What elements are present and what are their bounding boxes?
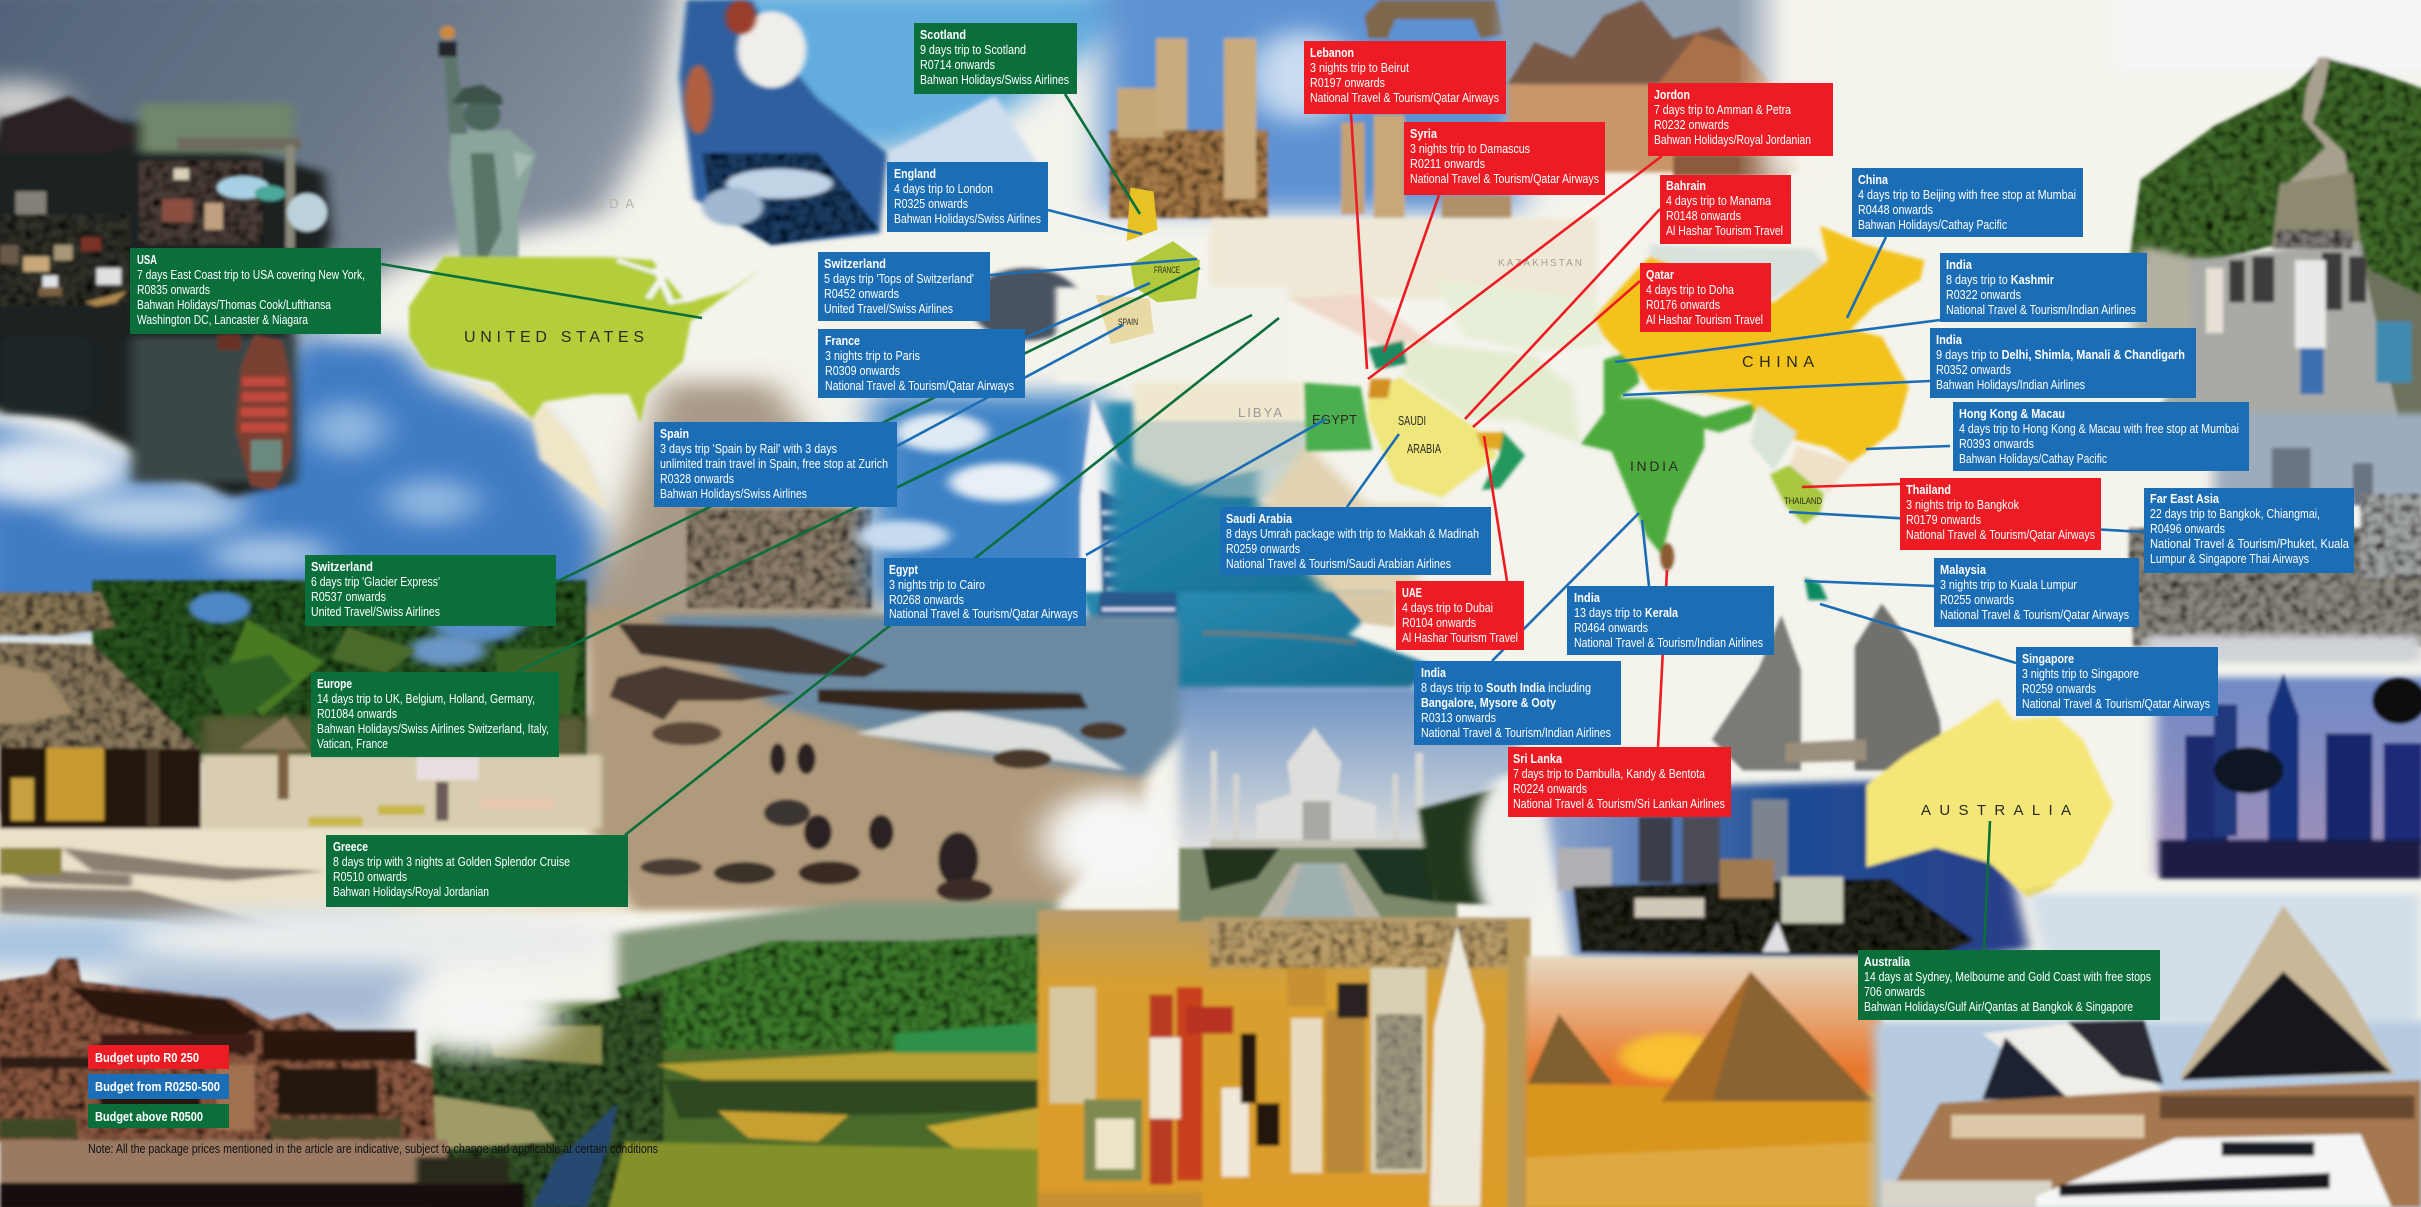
callout: Qatar: 4 days trip to Doha — [1646, 282, 1735, 297]
connector lines — [381, 94, 2144, 950]
callout: Qatar: Qatar — [1646, 267, 1674, 282]
blue sky and clouds — [0, 337, 617, 628]
callout: Spain: 3 days trip 'Spain by Rail' with 3 days — [660, 441, 837, 456]
callout: India Kerala: National Travel & Tourism/Indian Airlines — [1574, 635, 1763, 650]
callout: Australia: Bahwan Holidays/Gulf Air/Qantas at Bangkok & Singapore — [1864, 999, 2133, 1014]
callout: Greece: Bahwan Holidays/Royal Jordanian — [333, 884, 489, 899]
callout: Scotland: 9 days trip to Scotland — [920, 42, 1026, 57]
sea right — [1103, 402, 1258, 631]
sea and causeway — [1179, 592, 1434, 688]
pale blue sea — [2029, 894, 2421, 1026]
callout: Bahrain: 4 days trip to Manama — [1666, 193, 1772, 208]
callout: Greece: R0510 onwards — [333, 869, 407, 884]
floating market — [0, 80, 332, 498]
map: USA — [409, 256, 760, 513]
callout: India Kerala: R0464 onwards — [1574, 620, 1648, 635]
label: Spain: SPAIN — [1118, 317, 1138, 327]
legend: budget up to R0 250 — [88, 1045, 229, 1069]
ground — [0, 1140, 448, 1185]
callout: Singapore: National Travel & Tourism/Qatar Airways — [2022, 696, 2210, 711]
map: china — [1594, 226, 1924, 463]
callout: Thailand: 3 nights trip to Bangkok — [1906, 497, 2019, 512]
callout: Australia: 14 days at Sydney, Melbourne and Gold Coast with free stops — [1864, 969, 2151, 984]
callout: Malaysia — [1934, 558, 2139, 627]
label: Saudi: SAUDI — [1398, 413, 1426, 428]
sea and coast — [1110, 444, 1442, 628]
callout: Hong Kong and Macau: Hong Kong & Macau — [1959, 406, 2065, 421]
deck chair — [0, 848, 62, 875]
map: middle east — [1304, 341, 1525, 498]
callout: India Delhi — [1930, 328, 2196, 398]
callout: Saudi Arabia: 8 days Umrah package with trip to Makkah & Madinah — [1226, 526, 1479, 541]
callout: Greece: Greece — [333, 839, 368, 854]
callout: Thailand: National Travel & Tourism/Qatar Airways — [1906, 527, 2095, 542]
callout: India Delhi: R0352 onwards — [1936, 362, 2011, 377]
callout: China: 4 days trip to Beijing with free stop at Mumbai — [1858, 187, 2076, 202]
callout: Switzerland glacier: 6 days trip 'Glacier Express' — [311, 574, 440, 589]
callout: India South: National Travel & Tourism/Indian Airlines — [1421, 725, 1611, 740]
callout: France: France — [825, 333, 860, 348]
callout: Lebanon: 3 nights trip to Beirut — [1310, 60, 1409, 75]
burj al arab — [1080, 398, 1184, 628]
label: Australia: AUSTRALIA — [1921, 802, 2071, 819]
map labels — [464, 196, 2071, 819]
legend: budget above R0500 — [88, 1104, 229, 1128]
callout: UAE: 4 days trip to Dubai — [1402, 600, 1493, 615]
callout: Egypt: 3 nights trip to Cairo — [889, 577, 985, 592]
colombo — [1542, 778, 2029, 960]
callout: Lebanon — [1304, 41, 1506, 114]
label: United States: UNITED STATES — [464, 329, 644, 346]
legend: budget R0250-500 — [88, 1074, 229, 1099]
callout: India South: R0313 onwards — [1421, 710, 1496, 725]
papyrus left panel — [1038, 910, 1219, 1207]
callout: Syria: R0211 onwards — [1410, 156, 1485, 171]
kasbah — [0, 958, 436, 1142]
callout: Switzerland tops: Switzerland — [824, 256, 886, 271]
callout: Spain: unlimited train travel in Spain, free stop at Zurich — [660, 456, 888, 471]
callout: USA: R0835 onwards — [137, 282, 210, 297]
label: France: FRANCE — [1154, 265, 1180, 275]
connector: Kashmir — [1615, 320, 1940, 362]
callout: Jordan: Jordon — [1654, 87, 1690, 102]
callout: Spain: R0328 onwards — [660, 471, 734, 486]
chateau — [563, 383, 887, 635]
callout: Bahrain: Al Hashar Tourism Travel — [1666, 223, 1783, 238]
callout: India Delhi: India — [1936, 332, 1963, 347]
callout: India South: 8 days trip to South India including — [1421, 680, 1591, 695]
callout: Syria: 3 nights trip to Damascus — [1410, 141, 1530, 156]
callout: Spain: Bahwan Holidays/Swiss Airlines — [660, 486, 807, 501]
callout: Europe: R01084 onwards — [317, 706, 397, 721]
connector: USA — [381, 264, 702, 318]
callout: Far East Asia — [2144, 488, 2354, 573]
callout: Malaysia: Malaysia — [1940, 562, 1987, 577]
callout: Far East Asia: Far East Asia — [2150, 491, 2220, 506]
white glow beside taj — [1042, 790, 1181, 890]
callout: Lebanon: R0197 onwards — [1310, 75, 1385, 90]
callout: Egypt — [884, 558, 1086, 626]
pale map lands — [1056, 218, 1828, 498]
legend: budget above R0500: Budget above R0500 — [95, 1109, 203, 1124]
callout: Saudi Arabia: National Travel & Tourism/Saudi Arabian Airlines — [1226, 556, 1451, 571]
callout: India Kashmir: National Travel & Tourism/Indian Airlines — [1946, 302, 2136, 317]
callout: Spain: Spain — [660, 426, 689, 441]
callout: India Delhi: 9 days trip to Delhi, Shimla, Manali & Chandigarh — [1936, 347, 2185, 362]
legend: budget up to R0 250: Budget upto R0 250 — [95, 1050, 199, 1065]
connector: Bahrain — [1465, 209, 1660, 419]
legend: budget bands — [88, 1045, 229, 1128]
hong kong skyline — [2129, 413, 2421, 605]
connector: Saudi Arabia — [1347, 434, 1399, 507]
callout: England: England — [894, 166, 936, 181]
papyrus — [1187, 917, 1530, 1207]
callout: Greece — [326, 835, 628, 907]
callout: Sri Lanka: R0224 onwards — [1513, 781, 1587, 796]
callout: Egypt: Egypt — [889, 562, 919, 577]
callout: Thailand: Thailand — [1906, 482, 1951, 497]
callout: Australia: Australia — [1864, 954, 1911, 969]
callout: Lebanon: Lebanon — [1310, 45, 1354, 60]
label: Canada: ADA — [594, 196, 634, 211]
white haze — [394, 972, 563, 1057]
twin towers — [1712, 604, 1944, 770]
blue sky ruins — [1102, 0, 1519, 210]
callout: Sri Lanka: 7 days trip to Dambulla, Kandy & Bentota — [1513, 766, 1706, 781]
callout: Far East Asia: National Travel & Tourism/Phuket, Kuala — [2150, 536, 2350, 551]
callout: Singapore — [2016, 647, 2218, 716]
callout: UAE: UAE — [1402, 585, 1422, 600]
connector: Syria — [1384, 195, 1439, 352]
callout: Europe: 14 days trip to UK, Belgium, Holland, Germany, — [317, 691, 535, 706]
callout: France: R0309 onwards — [825, 363, 900, 378]
callout: USA — [130, 248, 381, 334]
callout: Saudi Arabia: Saudi Arabia — [1226, 511, 1293, 526]
great wall — [2113, 0, 2421, 459]
callout: India South — [1414, 661, 1621, 745]
map: south east asia — [1660, 406, 1851, 600]
callout: Europe: Europe — [317, 676, 352, 691]
connector: Greece — [625, 318, 1279, 835]
callout: Saudi Arabia — [1220, 507, 1491, 575]
taj mahal — [1179, 687, 1550, 929]
connector: UAE — [1484, 436, 1507, 581]
opera house — [1874, 906, 2421, 1207]
palm shadows — [0, 848, 324, 948]
callout: Greece: 8 days trip with 3 nights at Golden Splendor Cruise — [333, 854, 570, 869]
sea behind burj — [1080, 592, 1235, 681]
connector: Delhi — [1623, 381, 1930, 395]
connector: Egypt — [1086, 419, 1326, 555]
legend: budget R0250-500: Budget from R0250-500 — [95, 1079, 220, 1094]
photo collage: top left quadrant — [0, 0, 1258, 635]
clouds near Burj — [856, 394, 1103, 601]
callout: Scotland: Scotland — [920, 27, 966, 42]
callout: UAE — [1396, 581, 1524, 650]
palms — [93, 581, 586, 763]
callout: Switzerland tops: United Travel/Swiss Airlines — [824, 301, 953, 316]
callout: India Delhi: Bahwan Holidays/Indian Airlines — [1936, 377, 2085, 392]
label: Libya: LIBYA — [1238, 405, 1282, 420]
callout: Far East Asia: 22 days trip to Bangkok, Chiangmai, — [2150, 506, 2320, 521]
connector: Europe — [517, 315, 1252, 672]
beach sand — [0, 786, 741, 925]
callout: Europe: Bahwan Holidays/Swiss Airlines Switzerland, Italy, — [317, 721, 549, 736]
callout: Egypt: R0268 onwards — [889, 592, 964, 607]
label: Kazakhstan: KAZAKHSTAN — [1498, 258, 1582, 269]
callout: Hong Kong and Macau: R0393 onwards — [1959, 436, 2034, 451]
label: Thailand: THAILAND — [1784, 496, 1822, 506]
callout: India Kashmir: 8 days trip to Kashmir — [1946, 272, 2054, 287]
valley — [432, 902, 1065, 1207]
callout: Scotland: R0714 onwards — [920, 57, 995, 72]
callout: India Kashmir — [1940, 253, 2147, 322]
connector: China — [1847, 237, 1886, 318]
callout: Switzerland glacier: United Travel/Swiss Airlines — [311, 604, 440, 619]
callout: Lebanon: National Travel & Tourism/Qatar Airways — [1310, 90, 1499, 105]
callout: Singapore: 3 nights trip to Singapore — [2022, 666, 2139, 681]
callout: Scotland — [914, 23, 1077, 94]
callout: Malaysia: R0255 onwards — [1940, 592, 2014, 607]
connector: Thailand — [1802, 484, 1900, 487]
callout: Bahrain: R0148 onwards — [1666, 208, 1741, 223]
callout: England: R0325 onwards — [894, 196, 968, 211]
photo collage: bottom right quadrant — [1179, 592, 2421, 1207]
singapore skyline — [2156, 674, 2421, 879]
ruins right — [1341, 0, 1511, 218]
footnote: Note: All the package prices mentioned in the article are indicative, subject to change and applicable at certain conditions — [88, 1141, 658, 1156]
penguin beach — [586, 608, 1235, 910]
callout: England: Bahwan Holidays/Swiss Airlines — [894, 211, 1041, 226]
connector: Australia — [1984, 821, 1990, 950]
connector: Kerala — [1642, 520, 1649, 586]
label: Arabia: ARABIA — [1407, 441, 1441, 456]
ruins left — [1110, 38, 1268, 218]
callout: Sri Lanka: National Travel & Tourism/Sri Lankan Airlines — [1513, 796, 1725, 811]
connector: Lebanon — [1351, 114, 1367, 369]
callout: Switzerland tops: 5 days trip 'Tops of Switzerland' — [824, 271, 974, 286]
connector: Switzerland glacier — [556, 268, 1200, 582]
callout: USA: Bahwan Holidays/Thomas Cook/Lufthansa — [137, 297, 332, 312]
callout: Qatar — [1640, 263, 1771, 332]
callout: Spain — [654, 422, 897, 507]
soft clouds — [0, 910, 617, 1030]
connector: England — [1048, 210, 1142, 234]
map: western Europe — [1096, 188, 1200, 344]
dome — [971, 268, 1082, 341]
connector: Scotland — [1065, 94, 1140, 214]
callout: India Kashmir: R0322 onwards — [1946, 287, 2021, 302]
callout: Switzerland tops: R0452 onwards — [824, 286, 899, 301]
connector: Malaysia — [1805, 581, 1934, 586]
callout: India South: India — [1421, 665, 1447, 680]
callout: France — [818, 329, 1025, 398]
connector: Qatar — [1473, 281, 1640, 427]
callout: Syria — [1404, 122, 1605, 195]
haze bush — [417, 1157, 509, 1185]
jordan mountains — [1500, 0, 1816, 184]
callout: China: China — [1858, 172, 1889, 187]
callout: Scotland: Bahwan Holidays/Swiss Airlines — [920, 72, 1069, 87]
map: australia — [1866, 699, 2113, 898]
callout: China: R0448 onwards — [1858, 202, 1933, 217]
callout: Jordan: 7 days trip to Amman & Petra — [1654, 102, 1792, 117]
callout: India Kerala: India — [1574, 590, 1601, 605]
callout: Sri Lanka: Sri Lanka — [1513, 751, 1563, 766]
callout: Switzerland tops — [818, 252, 990, 321]
red boat — [218, 335, 292, 490]
callout: Hong Kong and Macau — [1953, 402, 2249, 471]
callout: USA: Washington DC, Lancaster & Niagara — [137, 312, 309, 327]
callout: China — [1852, 168, 2083, 237]
connector: Spain — [897, 325, 1123, 446]
map: india — [1581, 350, 1758, 555]
label: India: INDIA — [1630, 458, 1679, 474]
callout: Australia — [1858, 950, 2160, 1020]
callout: Jordan — [1648, 83, 1833, 156]
callout: Jordan: R0232 onwards — [1654, 117, 1729, 132]
callout: France: 3 nights trip to Paris — [825, 348, 920, 363]
photo collage: bottom left quadrant — [0, 581, 1235, 1207]
callout: Malaysia: 3 nights trip to Kuala Lumpur — [1940, 577, 2078, 592]
callout: Syria: National Travel & Tourism/Qatar Airways — [1410, 171, 1599, 186]
callout: Far East Asia: Lumpur & Singapore Thai Airways — [2150, 551, 2309, 566]
callout: Australia: 706 onwards — [1864, 984, 1925, 999]
callout: Egypt: National Travel & Tourism/Qatar Airways — [889, 606, 1078, 621]
connector: Sri Lanka — [1658, 570, 1667, 747]
callout: Europe: Vatican, France — [317, 736, 388, 751]
statue of liberty — [438, 26, 536, 283]
callout: Syria: Syria — [1410, 126, 1438, 141]
callout: Switzerland glacier: Switzerland — [311, 559, 373, 574]
callout: India Kerala — [1567, 586, 1774, 655]
hong kong skyline base — [2133, 592, 2421, 662]
callout: Switzerland glacier: R0537 onwards — [311, 589, 386, 604]
callout: France: National Travel & Tourism/Qatar Airways — [825, 378, 1014, 393]
callout: Bahrain: Bahrain — [1666, 178, 1706, 193]
beach huts — [0, 592, 201, 828]
callout: Bahrain — [1660, 175, 1791, 244]
callout: Switzerland glacier — [305, 555, 556, 626]
connector: Switzerland tops — [990, 259, 1197, 275]
connector: Singapore — [1820, 604, 2016, 663]
callout: India South: Bangalore, Mysore & Ooty — [1421, 695, 1557, 710]
beach cabana area — [201, 716, 602, 828]
callout: Europe — [311, 672, 559, 757]
label: Egypt: EGYPT — [1312, 412, 1357, 427]
connector: Far East — [1789, 512, 2144, 532]
callout: Hong Kong and Macau: Bahwan Holidays/Cathay Pacific — [1959, 451, 2107, 466]
callout: England — [887, 162, 1048, 232]
connector: South India — [1492, 513, 1639, 661]
callout: Jordan: Bahwan Holidays/Royal Jordanian — [1654, 132, 1811, 147]
callout: Qatar: R0176 onwards — [1646, 297, 1720, 312]
callout: Far East Asia: R0496 onwards — [2150, 521, 2225, 536]
callout: Malaysia: National Travel & Tourism/Qatar Airways — [1940, 607, 2129, 622]
connector: Hong Kong — [1866, 446, 1950, 449]
callout: Saudi Arabia: R0259 onwards — [1226, 541, 1300, 556]
callout: Qatar: Al Hashar Tourism Travel — [1646, 312, 1763, 327]
callout: Thailand — [1900, 478, 2101, 550]
callout: UAE: Al Hashar Tourism Travel — [1402, 630, 1518, 645]
callout: USA: USA — [137, 252, 157, 267]
callout: USA: 7 days East Coast trip to USA covering New York, — [137, 267, 365, 282]
callout: Hong Kong and Macau: 4 days trip to Hong Kong & Macau with free stop at Mumbai — [1959, 421, 2239, 436]
photo collage: top right quadrant — [1056, 0, 2421, 628]
label: China: CHINA — [1742, 354, 1814, 371]
callout: Singapore: Singapore — [2022, 651, 2074, 666]
callout: England: 4 days trip to London — [894, 181, 993, 196]
callout: Sri Lanka — [1508, 747, 1731, 817]
burj base and island — [1059, 592, 1201, 681]
callout: China: Bahwan Holidays/Cathay Pacific — [1858, 217, 2007, 232]
snowy mountain and sky — [679, 0, 1173, 245]
callout: India Kerala: 13 days trip to Kerala — [1574, 605, 1679, 620]
connector: France — [1025, 283, 1150, 338]
ground shadow — [0, 1183, 525, 1207]
callout: India Kashmir: India — [1946, 257, 1973, 272]
connector: Jordan — [1368, 156, 1662, 379]
grey sky — [0, 0, 679, 344]
callout: UAE: R0104 onwards — [1402, 615, 1476, 630]
callout: Thailand: R0179 onwards — [1906, 512, 1981, 527]
pyramids — [1527, 956, 1882, 1207]
callout: Singapore: R0259 onwards — [2022, 681, 2096, 696]
